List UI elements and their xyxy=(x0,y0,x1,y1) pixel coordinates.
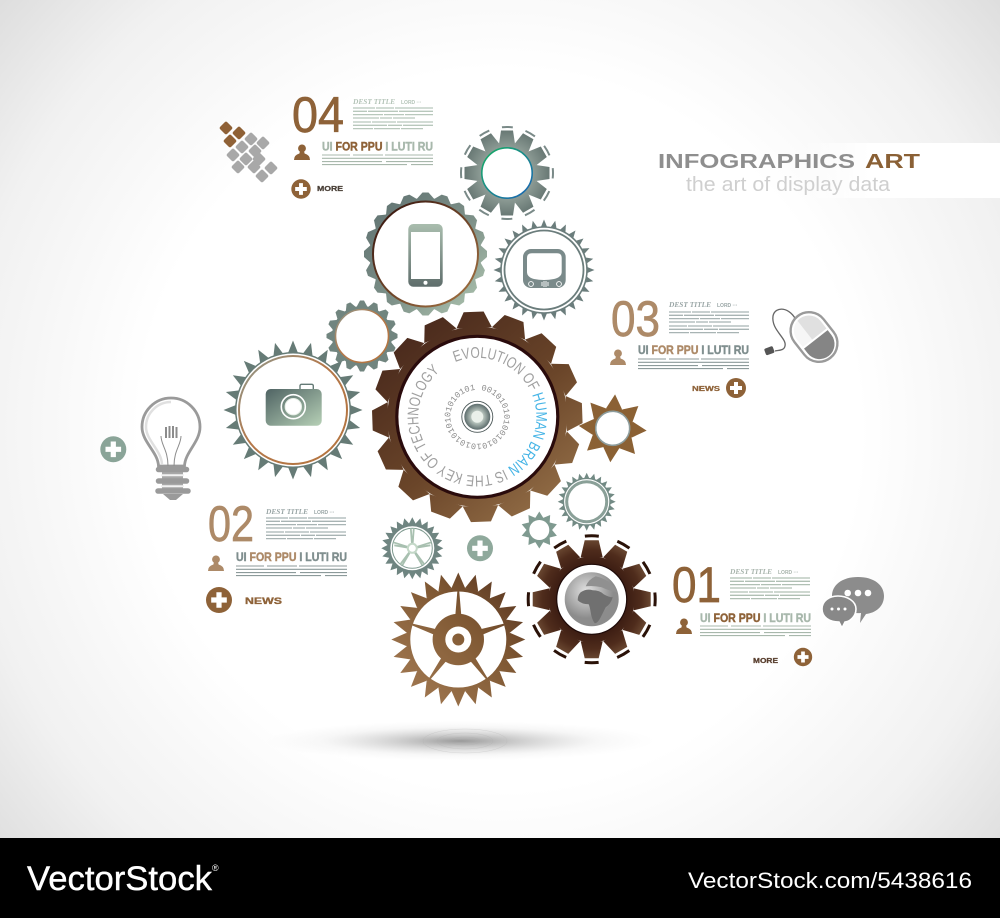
small label: MORE xyxy=(753,658,778,665)
block title: DEST TITLE xyxy=(729,567,772,576)
block title: DEST TITLE xyxy=(265,507,308,516)
gear: monitor xyxy=(487,211,605,331)
paragraph xyxy=(266,518,346,539)
block title: DEST TITLE xyxy=(668,300,711,309)
info block 02 xyxy=(206,496,347,613)
info block 03 xyxy=(610,291,749,398)
gear: brown star xyxy=(576,392,649,465)
block title: DEST TITLE xyxy=(352,97,395,106)
footer trademark: ® xyxy=(212,863,219,873)
person icon xyxy=(208,556,224,571)
gear: phone xyxy=(362,190,490,318)
gear: green ring xyxy=(460,126,554,220)
gear: camera xyxy=(189,319,380,520)
gear: spoked wheel xyxy=(366,507,452,598)
sub heading: UI FOR PPU I LUTI RU xyxy=(236,550,347,564)
info block 01 xyxy=(672,557,812,666)
gear: central brown xyxy=(372,312,583,522)
paragraph xyxy=(730,578,810,599)
person icon xyxy=(294,144,310,160)
block tag: LORD ··· xyxy=(717,303,738,309)
number 03: 03 xyxy=(611,291,660,347)
number 01: 01 xyxy=(672,557,721,613)
gear: small ring xyxy=(543,463,623,548)
rules xyxy=(322,155,433,165)
info block 04 xyxy=(291,87,433,199)
footer brand: VectorStock xyxy=(27,860,213,898)
plus button: bulb xyxy=(100,436,126,462)
block tag: LORD ··· xyxy=(314,510,335,516)
small label: NEWS xyxy=(692,386,720,393)
paragraph xyxy=(669,312,749,333)
diamond pattern xyxy=(219,121,278,183)
title band xyxy=(658,143,1000,198)
subtitle: the art of display data xyxy=(686,174,891,196)
footer bar xyxy=(0,838,1000,918)
rules xyxy=(236,566,347,576)
sub heading: UI FOR PPU I LUTI RU xyxy=(322,140,433,154)
rules xyxy=(638,359,749,369)
heading: INFOGRAPHICS xyxy=(658,151,855,173)
gear: small slate xyxy=(326,300,398,372)
number 04: 04 xyxy=(292,87,344,143)
gear: large spoked brown xyxy=(388,570,528,710)
icon: light bulb xyxy=(142,398,200,500)
number 02: 02 xyxy=(208,496,254,552)
icon: monitor xyxy=(523,249,566,288)
gear: pale star xyxy=(520,512,558,548)
person icon xyxy=(676,618,692,634)
block tag: LORD ··· xyxy=(778,570,799,576)
plus button xyxy=(206,587,232,613)
small label: MORE xyxy=(317,186,343,193)
plus button xyxy=(726,378,746,398)
icon: camera xyxy=(266,384,322,426)
sub heading: UI FOR PPU I LUTI RU xyxy=(700,611,811,625)
sub heading: UI FOR PPU I LUTI RU xyxy=(638,343,749,357)
icon: phone xyxy=(408,224,443,287)
footer url: VectorStock.com/5438616 xyxy=(688,868,972,893)
rules xyxy=(700,626,811,636)
plus button xyxy=(794,648,812,666)
person icon xyxy=(610,350,626,365)
icon: mouse xyxy=(764,305,845,369)
binary ring: 00101010100101010101010101010101 xyxy=(444,384,510,450)
small label: NEWS xyxy=(245,596,282,606)
circular slogan: EVOLUTION OF HUMAN BRAIN IS THE KEY OF TECHNOLOGY xyxy=(408,347,547,486)
plus button: center xyxy=(467,535,493,561)
icon: globe xyxy=(565,572,619,626)
heading accent: ART xyxy=(865,151,920,173)
plus button xyxy=(291,179,311,199)
paragraph xyxy=(353,108,433,129)
block tag: LORD ··· xyxy=(401,100,422,106)
icon: speech bubbles xyxy=(822,577,884,628)
ground shadow xyxy=(265,721,655,761)
center hub xyxy=(462,401,493,432)
gear: globe xyxy=(528,536,655,663)
